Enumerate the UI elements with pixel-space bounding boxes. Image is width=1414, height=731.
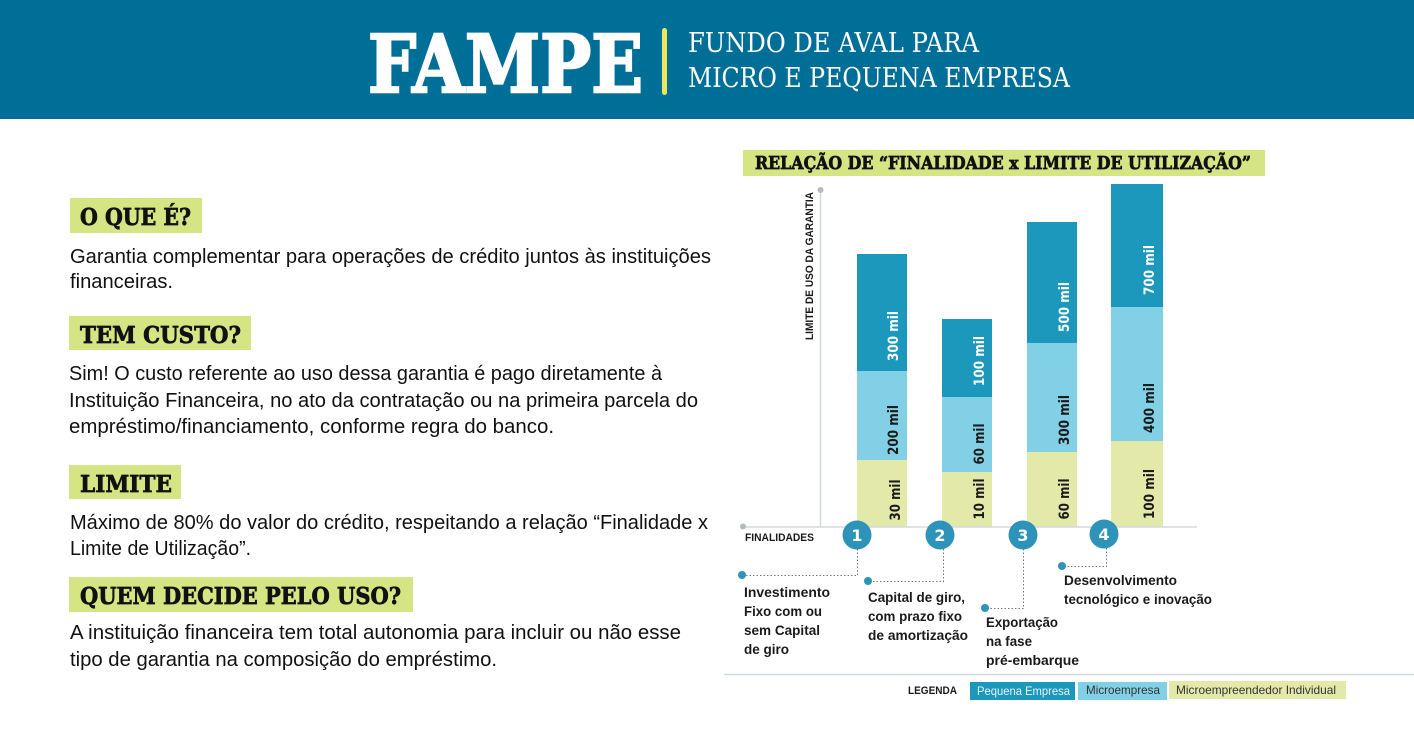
subtitle: FUNDO DE AVAL PARA xyxy=(688,28,979,59)
text: Tem custo xyxy=(69,363,698,438)
purpose 1 xyxy=(738,520,872,657)
text: O que é: financeiras. xyxy=(70,271,173,293)
purpose 1: 1 xyxy=(851,526,863,545)
purpose 2: de amortização xyxy=(868,627,968,643)
section: O que é xyxy=(70,198,711,293)
section: Limite xyxy=(69,465,708,560)
y axis label: LIMITE DE USO DA GARANTIA xyxy=(804,192,816,340)
text: O que é xyxy=(70,246,711,293)
purpose 3: Exportação xyxy=(986,614,1058,630)
x axis label: FINALIDADES xyxy=(745,532,814,544)
bar 2 xyxy=(942,319,992,527)
purpose 4: tecnológico e inovação xyxy=(1064,591,1212,607)
heading: Tem custo: TEM CUSTO? xyxy=(80,322,241,349)
heading: Limite xyxy=(69,465,181,499)
text: Limite: Máximo de 80% do valor do crédito, respeitando a relação “Finalidade x xyxy=(70,512,708,534)
purpose 3: pré-embarque xyxy=(986,652,1079,668)
legend: Microempreendedor Individual: Microempreendedor Individual xyxy=(1176,683,1336,697)
purpose 2: com prazo fixo xyxy=(868,608,962,624)
purpose 3: na fase xyxy=(986,633,1032,649)
text: Tem custo: Sim! O custo referente ao uso dessa garantia é pago diretamente à xyxy=(69,363,663,385)
bar 3: 60 mil xyxy=(1057,478,1073,520)
bar 3: 300 mil xyxy=(1057,395,1073,445)
heading: Quem decide: QUEM DECIDE PELO USO? xyxy=(80,583,401,610)
bar 3: 500 mil xyxy=(1057,282,1073,332)
purpose 1: Investimento xyxy=(744,584,830,600)
purpose 1: sem Capital xyxy=(744,622,820,638)
text: Quem decide: A instituição financeira tem total autonomia para incluir ou não esse xyxy=(70,622,681,644)
bar 1: 200 mil xyxy=(886,405,902,455)
bar 3 xyxy=(1027,222,1077,527)
purpose 1: Fixo com ou xyxy=(744,603,822,619)
bar 4: 700 mil xyxy=(1142,245,1158,295)
purpose 4 xyxy=(1058,520,1212,607)
legend: LEGENDA xyxy=(908,685,957,697)
y axis xyxy=(818,187,824,527)
heading: Limite: LIMITE xyxy=(80,471,172,498)
bar 2: 10 mil xyxy=(972,478,988,520)
section: Tem custo xyxy=(69,316,698,438)
header divider xyxy=(662,28,667,95)
subtitle: MICRO E PEQUENA EMPRESA xyxy=(688,63,1070,94)
title: FAMPE: FAMPE xyxy=(368,17,643,111)
text: O que é: Garantia complementar para operações de crédito juntos às instituições xyxy=(70,246,711,268)
purpose 4: Desenvolvimento xyxy=(1064,572,1177,588)
purpose 2: 2 xyxy=(934,526,946,545)
subtitle xyxy=(688,28,1070,94)
header banner xyxy=(0,0,1414,119)
legend: Microempresa xyxy=(1078,682,1167,700)
bar 1: 30 mil xyxy=(888,480,904,520)
purpose 2 xyxy=(864,520,968,643)
text: Tem custo: empréstimo/financiamento, conforme regra do banco. xyxy=(69,416,554,438)
bar 4: 100 mil xyxy=(1142,469,1158,519)
purpose 2: Capital de giro, xyxy=(868,589,965,605)
purpose 4: 4 xyxy=(1098,525,1110,544)
bar 1: 300 mil xyxy=(886,311,902,361)
text: Limite xyxy=(70,512,708,560)
text: Tem custo: Instituição Financeira, no ato da contratação ou na primeira parcela do xyxy=(69,390,698,412)
legend: Pequena Empresa: Pequena Empresa xyxy=(977,684,1070,698)
stacked bar chart xyxy=(740,184,1197,544)
text: Quem decide: tipo de garantia na composição do empréstimo. xyxy=(70,649,497,671)
bar 1 xyxy=(857,254,907,527)
purpose 3: 3 xyxy=(1017,526,1029,545)
bar 2: 60 mil xyxy=(972,424,988,464)
purpose 3 xyxy=(981,520,1079,668)
text: Quem decide xyxy=(70,622,681,671)
legend xyxy=(908,681,1346,700)
section: Quem decide xyxy=(69,577,681,671)
bar 4 xyxy=(1111,184,1163,527)
bar 2: 100 mil xyxy=(972,336,988,386)
heading: O que é: O QUE É? xyxy=(80,204,191,231)
purpose 1: de giro xyxy=(744,641,789,657)
text: Limite: Limite de Utilização”. xyxy=(70,538,251,560)
bar 4: 400 mil xyxy=(1142,383,1158,433)
x axis xyxy=(740,524,1197,530)
chart title: RELAÇÃO DE “FINALIDADE x LIMITE DE UTILIZAÇÃO” xyxy=(755,151,1251,174)
legend: Microempresa: Microempresa xyxy=(1086,683,1160,697)
